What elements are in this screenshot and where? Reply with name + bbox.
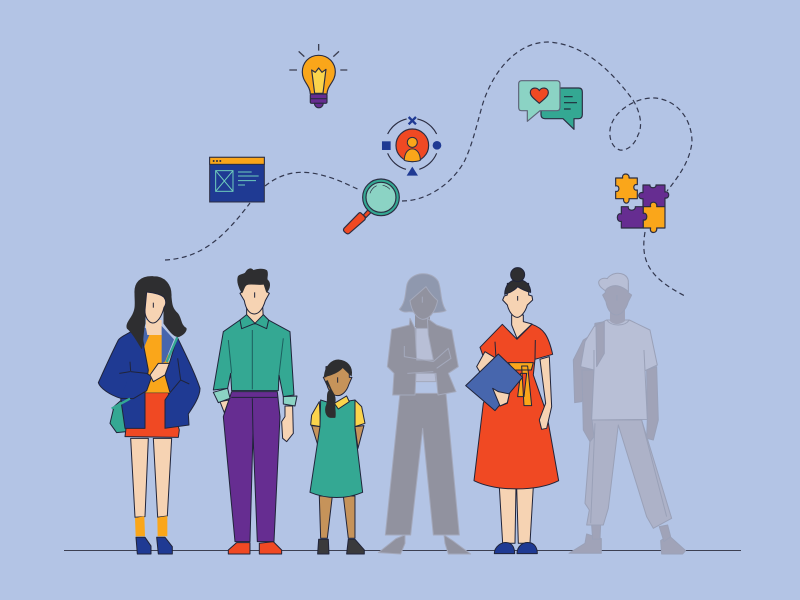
icon: chat bubbles [519, 81, 582, 129]
head [410, 287, 438, 319]
right arm [539, 357, 552, 429]
skirt [125, 393, 179, 437]
hair [127, 277, 186, 348]
dress [474, 324, 559, 489]
icon: browser window [210, 157, 264, 202]
arms [312, 426, 364, 448]
neck [512, 315, 532, 338]
jacket [387, 318, 458, 395]
bag strap [112, 337, 177, 409]
neck [610, 310, 625, 324]
backpack [573, 322, 605, 403]
legs [319, 496, 355, 538]
boots [569, 534, 686, 554]
ankles [592, 525, 671, 542]
neck [415, 313, 430, 335]
shoes [318, 539, 364, 554]
collar [240, 315, 269, 329]
shoes [228, 542, 282, 554]
hair [505, 279, 531, 294]
cuffs [213, 388, 297, 406]
icon: jigsaw puzzle pieces [616, 174, 669, 232]
arms [582, 367, 658, 442]
socks [135, 516, 167, 536]
head [503, 283, 533, 317]
figure: woman in blue jacket [98, 277, 200, 554]
hand [150, 363, 169, 382]
jacket right panel [165, 337, 200, 428]
dashed journey path [165, 42, 692, 296]
figure: faded woman with crossed arms [378, 274, 471, 554]
sleeve cuff [121, 372, 152, 399]
legs [499, 487, 533, 543]
braid [326, 381, 335, 417]
icon: magnifying glass [343, 179, 399, 234]
trousers [585, 420, 672, 528]
sleeves [311, 400, 365, 427]
trousers [223, 392, 280, 542]
neck [247, 306, 263, 324]
figure: faded man with cap and backpack [569, 273, 686, 554]
t-shirt [581, 320, 657, 420]
hair [238, 269, 270, 293]
shoes [136, 537, 172, 554]
top [143, 335, 170, 393]
jacket collar [140, 325, 174, 363]
sash [508, 363, 533, 406]
folder [466, 354, 523, 411]
left arm [477, 352, 509, 406]
hair [399, 274, 446, 313]
head [603, 283, 632, 315]
neck [146, 320, 162, 335]
hand over folder [493, 388, 509, 406]
hair [324, 360, 352, 377]
dress [310, 400, 363, 498]
collar [334, 396, 349, 409]
icon: light bulb [289, 44, 347, 108]
head [323, 367, 352, 396]
jacket left panel [98, 325, 148, 428]
head [240, 280, 269, 314]
cap [599, 273, 628, 292]
backpack [110, 398, 127, 433]
ground line [64, 550, 741, 552]
shirt [213, 320, 294, 397]
figure: woman in red dress [466, 268, 559, 554]
figure: girl in green pinafore [310, 360, 365, 554]
head [145, 292, 166, 323]
legs [131, 438, 172, 517]
trousers [385, 393, 459, 535]
boots [378, 535, 471, 554]
icon: person target with shapes [382, 117, 441, 176]
hands [220, 400, 293, 442]
top [415, 328, 436, 382]
shoes [494, 543, 537, 554]
figure: man in green shirt [213, 269, 297, 554]
